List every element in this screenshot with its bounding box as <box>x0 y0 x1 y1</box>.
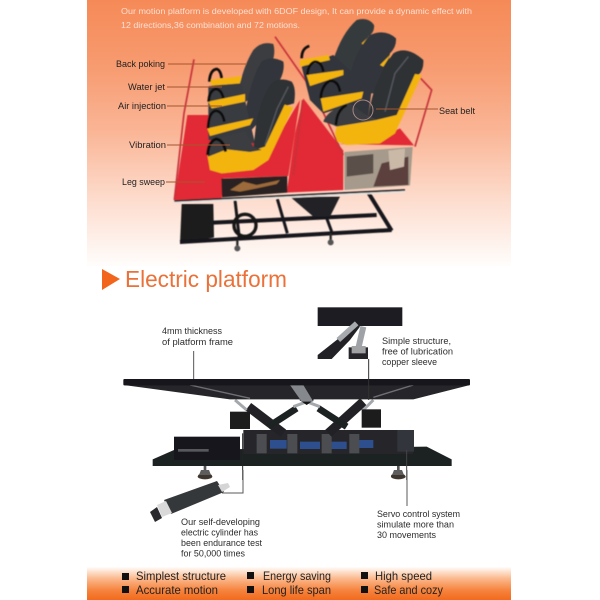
leader lines lower <box>222 470 407 506</box>
note: simple structure: free of lubrication <box>382 346 453 358</box>
diagram: electric platform <box>123 307 470 480</box>
note: platform frame: 4mm thickness <box>162 326 222 337</box>
panel: orange gradient background <box>87 0 511 266</box>
illustration: motion simulator with six seats <box>174 19 432 251</box>
feature labels: Water jet <box>128 82 166 92</box>
feature text: High speed <box>375 569 432 583</box>
rails <box>174 37 432 200</box>
left seat row <box>207 43 295 173</box>
feature labels: Seat belt <box>439 106 476 116</box>
inset: joint detail <box>318 307 402 359</box>
feature text: Safe and cozy <box>374 583 443 597</box>
note: servo control <box>377 509 460 541</box>
feature text: Simplest structure <box>136 569 226 583</box>
feature labels: Air injection <box>118 101 166 111</box>
note: simple structure: Simple structure, <box>382 336 451 347</box>
note: simple structure: copper sleeve <box>382 357 437 368</box>
feature labels: Leg sweep <box>122 177 165 187</box>
feature text: Accurate motion <box>136 583 218 597</box>
red floor <box>174 98 414 200</box>
note: platform frame <box>162 326 233 348</box>
leader lines <box>194 351 407 480</box>
heading: Electric platform: Electric platform <box>125 266 287 292</box>
feature labels: Back poking <box>116 59 165 69</box>
note: servo control: 30 movements <box>377 530 436 541</box>
bullets <box>122 572 368 593</box>
panel: bottom orange band <box>87 567 511 600</box>
feature labels: Vibration <box>129 140 166 150</box>
intro text: Our motion platform is developed with 6DOF design, It can provide a dynamic effect with <box>121 7 472 16</box>
lower plate <box>153 447 452 479</box>
side artwork panel <box>344 147 413 190</box>
right seat row <box>300 19 423 145</box>
feature text <box>136 569 443 597</box>
actuators <box>230 395 381 433</box>
feature list <box>122 569 443 597</box>
callout lines <box>166 64 438 182</box>
note: electric cylinder: Our self-developing <box>181 517 260 528</box>
intro text: 12 directions,36 combination and 72 motions. <box>121 21 300 30</box>
platform edge <box>174 190 405 203</box>
note: electric cylinder: for 50,000 times <box>181 548 245 560</box>
feet lower part <box>198 470 405 479</box>
feature text: Long life span <box>262 583 331 597</box>
note: electric cylinder: been endurance test <box>181 538 262 549</box>
icon: electric cylinder <box>150 481 230 522</box>
note: platform frame: of platform frame <box>162 337 233 348</box>
control box <box>174 437 240 460</box>
note: servo control: Servo control system <box>377 509 460 520</box>
base frame <box>180 193 392 251</box>
heading: arrow icon <box>102 269 120 290</box>
note: simple structure <box>382 336 453 368</box>
motor row <box>243 430 414 454</box>
feature labels <box>116 59 476 187</box>
front artwork panel <box>221 176 287 197</box>
note: electric cylinder: electric cylinder has <box>181 528 258 538</box>
feature text: Energy saving <box>263 569 331 583</box>
note: electric cylinder <box>181 517 262 560</box>
note: servo control: simulate more than <box>377 520 454 530</box>
intro text <box>121 7 472 30</box>
upper platform frame <box>123 379 470 402</box>
